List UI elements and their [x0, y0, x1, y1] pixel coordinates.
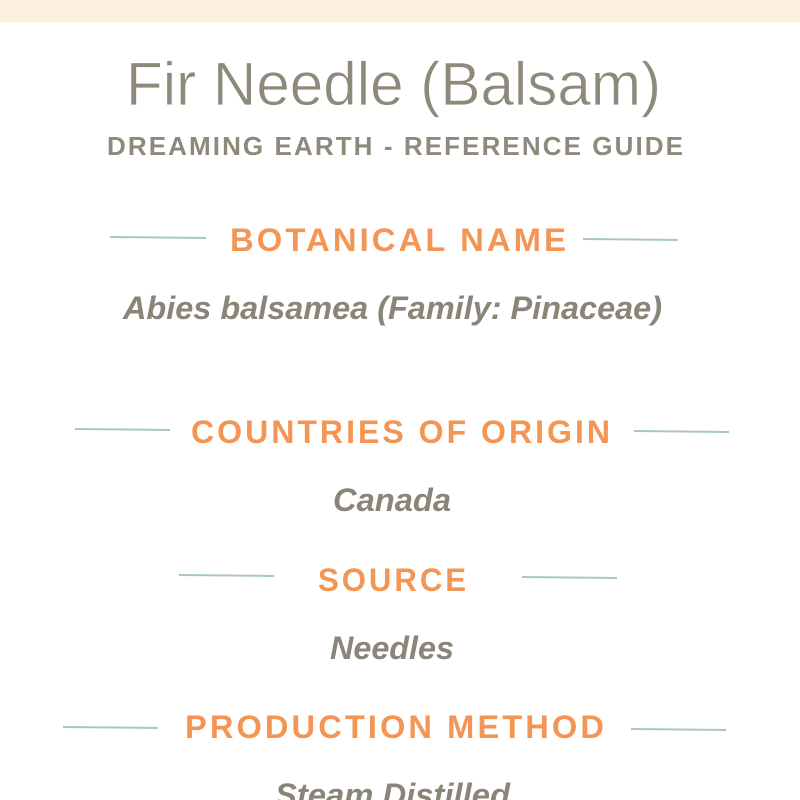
section: production method [63, 709, 726, 800]
section: botanical name [110, 222, 678, 326]
section: source [179, 562, 617, 666]
value: botanical name: Abies balsamea (Family: Pinaceae) [122, 290, 662, 326]
subtitle: DREAMING EARTH - REFERENCE GUIDE [107, 131, 683, 161]
value: source: Needles [330, 630, 454, 666]
heading: countries of origin: COUNTRIES OF ORIGIN [191, 414, 613, 450]
heading: production method: PRODUCTION METHOD [185, 709, 607, 745]
title: Fir Needle (Balsam) [126, 50, 661, 118]
heading: source: SOURCE [318, 562, 469, 598]
heading: botanical name: BOTANICAL NAME [230, 222, 569, 258]
value: countries of origin: Canada [333, 482, 451, 518]
top banner [0, 0, 800, 22]
section: countries of origin [75, 414, 729, 518]
